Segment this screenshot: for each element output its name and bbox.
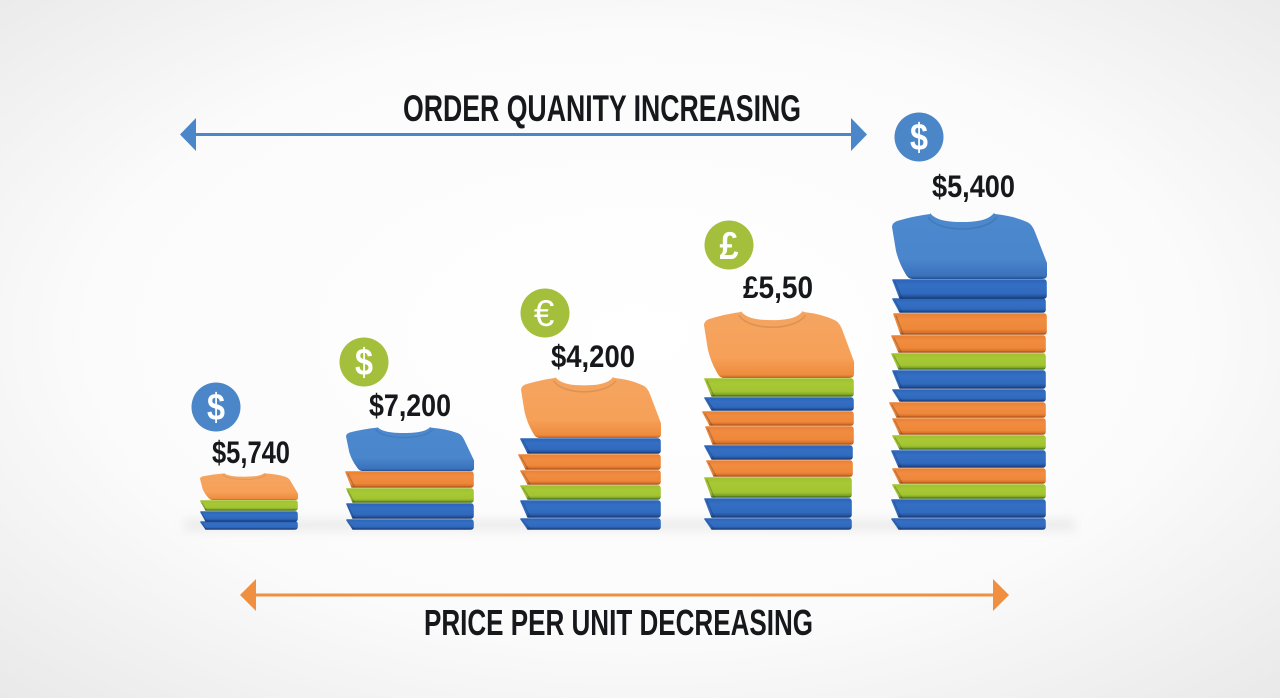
icon: blue dollar coin, stack 1: $ — [207, 387, 225, 429]
folded layers — [703, 379, 853, 529]
folded layers — [346, 472, 473, 529]
top shirt — [521, 377, 661, 438]
arrow: price per unit, orange double-headed — [240, 579, 1009, 611]
icon: blue dollar coin, stack 5: $ — [910, 117, 928, 159]
top shirt — [200, 473, 298, 500]
icon: green euro coin, stack 3 — [520, 288, 570, 338]
icon: green dollar coin, stack 2 — [340, 338, 388, 386]
floor shadow — [185, 519, 1075, 531]
folded layers — [201, 501, 297, 529]
icon: green pound coin, stack 4: £ — [720, 225, 739, 268]
icon: green euro coin, stack 3: € — [534, 293, 555, 334]
stack 2 — [346, 427, 474, 529]
stack 1: smallest order — [200, 473, 298, 529]
price label: £5,50: £5,50 — [743, 269, 813, 305]
heading: price per unit: PRICE PER UNIT DECREASING — [424, 602, 813, 643]
folded layers — [519, 439, 660, 529]
stack 5: largest order — [890, 213, 1047, 529]
price label: $7,200: $7,200 — [369, 387, 451, 423]
icon: blue dollar coin, stack 1 — [192, 382, 240, 432]
price label: $4,200: $4,200 — [551, 338, 635, 374]
arrow: order quantity, blue double-headed — [180, 118, 867, 151]
price label: $5,740: $5,740 — [212, 434, 290, 470]
price label: $5,400: $5,400 — [932, 168, 1015, 204]
stack 3 — [519, 377, 661, 529]
icon: blue dollar coin, stack 5 — [894, 112, 944, 162]
top shirt — [892, 213, 1047, 279]
stack 4 — [703, 311, 854, 529]
icon: green pound coin, stack 4 — [704, 220, 754, 270]
icon: green dollar coin, stack 2: $ — [355, 342, 373, 384]
heading: order quantity: ORDER QUANITY INCREASING — [403, 88, 801, 129]
top shirt — [704, 311, 854, 378]
top shirt — [346, 427, 474, 471]
folded layers — [890, 280, 1046, 529]
